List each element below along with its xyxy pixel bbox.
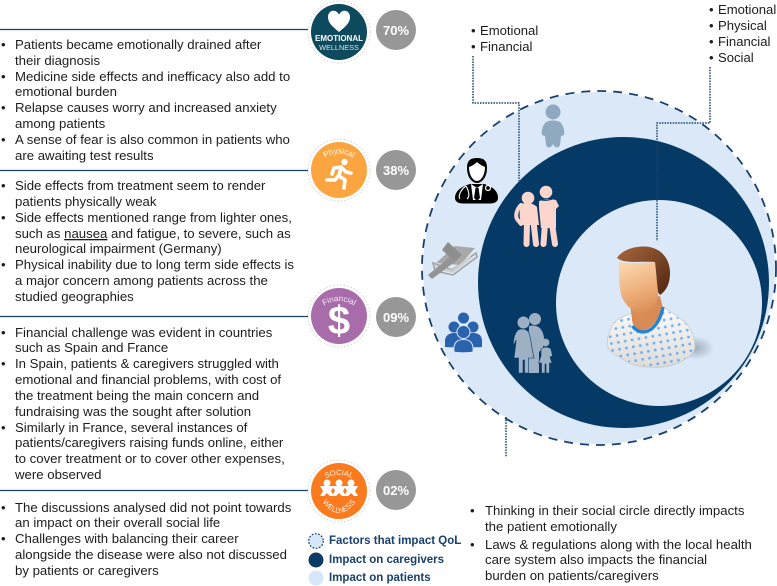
- text block: social wellness findings: [1, 500, 292, 578]
- label: emotional, physical, financial, social: Emotional: [718, 2, 776, 17]
- percentage: physical 38%: [376, 150, 416, 190]
- text block: emotional wellness findings: •: [1, 100, 6, 115]
- nested impact circles: [422, 91, 776, 445]
- badge: emotional wellness: EMOTIONAL: [315, 34, 363, 43]
- percentage: emotional 70%: [376, 10, 416, 50]
- percentage: physical 38%: 38%: [383, 163, 409, 178]
- legend: Impact on patients: [329, 572, 431, 584]
- badge: social wellness: WELLNESS: [323, 498, 355, 514]
- text block: financial wellness findings: such as Spain and France: [15, 340, 168, 355]
- text block: physical wellness findings: •: [1, 210, 6, 225]
- text block: social circle and healthcare system: the patient emotionally: [485, 519, 617, 534]
- text block: emotional wellness findings: •: [1, 132, 6, 147]
- icon: child: [542, 104, 564, 148]
- text block: physical wellness findings: •: [1, 257, 6, 272]
- text block: emotional wellness findings: emotional burden: [15, 84, 117, 99]
- label: emotional, financial: •: [471, 23, 476, 38]
- text block: social circle and healthcare system: [470, 503, 752, 583]
- dotted leader: social circle: [505, 417, 507, 457]
- caregiver circle: [478, 137, 769, 428]
- legend: [308, 534, 461, 586]
- badge: emotional wellness: [308, 1, 370, 63]
- text block: financial wellness findings: the treatment being the main concern and: [15, 388, 259, 403]
- text block: social wellness findings: alongside the disease were also not discussed: [15, 547, 287, 562]
- text block: physical wellness findings: such as nausea and fatigue, to severe, such as: [15, 226, 291, 241]
- label: emotional, financial: Financial: [480, 39, 532, 54]
- label: emotional, physical, financial, social: •: [709, 34, 714, 49]
- text block: physical wellness findings: Physical inability due to long term side effects is: [15, 257, 294, 272]
- text block: financial wellness findings: Financial challenge was evident in countries: [15, 325, 273, 340]
- badge: financial: [308, 284, 370, 348]
- badge: financial: $: [328, 299, 350, 343]
- badge: emotional wellness: WELLNESS: [319, 43, 359, 52]
- percentage: social 02%: 02%: [383, 483, 409, 498]
- label: emotional, financial: •: [471, 39, 476, 54]
- text block: financial wellness findings: to cover treatment or to cover other expenses,: [15, 451, 285, 466]
- label: emotional, physical, financial, social: •: [709, 50, 714, 65]
- percentage: social 02%: [376, 470, 416, 510]
- text block: physical wellness findings: Side effects from treatment seem to render: [15, 178, 266, 193]
- text block: financial wellness findings: [1, 325, 285, 482]
- text block: financial wellness findings: patients/caregivers raising funds online, either: [15, 435, 284, 450]
- text block: financial wellness findings: In Spain, patients & caregivers struggled with: [15, 356, 279, 371]
- label: emotional, physical, financial, social: Social: [718, 50, 754, 65]
- text block: social circle and healthcare system: Laws & regulations along with the local health: [485, 537, 752, 552]
- outer dashed ring: [422, 91, 776, 445]
- text block: emotional wellness findings: [1, 37, 290, 163]
- neck: [630, 296, 663, 331]
- badge: physical: Physical: [323, 148, 356, 158]
- label: emotional, financial: [471, 23, 538, 54]
- label: emotional, physical, financial, social: Financial: [718, 34, 770, 49]
- text block: social wellness findings: •: [1, 531, 6, 546]
- icon: doctor: [455, 158, 498, 204]
- text block: financial wellness findings: Similarly in France, several instances of: [15, 420, 248, 435]
- percentage: financial 09%: [376, 297, 416, 337]
- patient circle: [556, 200, 762, 406]
- text block: social wellness findings: The discussions analysed did not point towards: [15, 500, 292, 515]
- dotted leader: emotional and financial: [473, 56, 519, 181]
- icon: gavel on law book: [428, 242, 477, 279]
- hair: [617, 246, 670, 295]
- text block: social circle and healthcare system: •: [470, 537, 475, 552]
- text block: social wellness findings: Challenges with balancing their career: [15, 531, 239, 546]
- face: [619, 262, 658, 314]
- text block: social wellness findings: an impact on their overall social life: [15, 515, 220, 530]
- percentage: emotional 70%: 70%: [383, 23, 409, 38]
- text block: social circle and healthcare system: •: [470, 503, 475, 518]
- percentage: financial 09%: 09%: [383, 310, 409, 325]
- text block: social wellness findings: by patients or caregivers: [15, 563, 159, 578]
- outer circle: factors that impact QoL: [423, 92, 775, 444]
- label: emotional, financial: Emotional: [480, 23, 538, 38]
- shadow: [676, 336, 714, 360]
- section divider lines: [0, 30, 310, 490]
- label: emotional, physical, financial, social: •: [709, 2, 714, 17]
- badge: social wellness: SOCIAL: [324, 470, 352, 478]
- text block: physical wellness findings: [1, 178, 294, 304]
- text block: emotional wellness findings: •: [1, 37, 6, 52]
- label: emotional, physical, financial, social: [709, 2, 776, 65]
- label: emotional, physical, financial, social: •: [709, 18, 714, 33]
- text block: emotional wellness findings: Medicine side effects and inefficacy also add to: [15, 69, 290, 84]
- text block: emotional wellness findings: Patients became emotionally drained after: [15, 37, 262, 52]
- text block: physical wellness findings: studied geographies: [15, 289, 134, 304]
- legend: Factors that impact QoL: [329, 535, 461, 547]
- text block: financial wellness findings: •: [1, 420, 6, 435]
- dotted leader: all four factors: [657, 67, 710, 241]
- ear: [654, 275, 666, 291]
- text block: financial wellness findings: emotional and financial problems, with cost of: [15, 372, 281, 387]
- gown: [607, 307, 695, 367]
- label: emotional, physical, financial, social: Physical: [718, 18, 767, 33]
- text block: emotional wellness findings: Relapse causes worry and increased anxiety: [15, 100, 277, 115]
- text block: emotional wellness findings: A sense of fear is also common in patients who: [15, 132, 290, 147]
- legend: Impact on caregivers: [329, 554, 444, 566]
- text block: emotional wellness findings: their diagnosis: [15, 53, 100, 68]
- text block: financial wellness findings: •: [1, 325, 6, 340]
- text block: emotional wellness findings: •: [1, 69, 6, 84]
- collar: [632, 307, 663, 332]
- text block: emotional wellness findings: are awaiting test results: [15, 148, 154, 163]
- text block: social circle and healthcare system: Thinking in their social circle directly impacts: [485, 503, 745, 518]
- badge: financial: Financial: [322, 296, 356, 306]
- icon: couple supporting each other: [516, 186, 560, 244]
- icon: group of people: [445, 312, 482, 353]
- text block: physical wellness findings: •: [1, 178, 6, 193]
- text block: physical wellness findings: patients physically weak: [15, 194, 157, 209]
- badge: social wellness: [308, 460, 370, 522]
- text block: social circle and healthcare system: burden on patients/caregivers: [485, 568, 659, 583]
- text block: physical wellness findings: Side effects mentioned range from lighter ones,: [15, 210, 292, 225]
- text block: physical wellness findings: neurological impairment (Germany): [15, 241, 222, 256]
- badge: physical: [308, 138, 370, 202]
- text block: physical wellness findings: a major concern among patients across the: [15, 273, 268, 288]
- text block: social circle and healthcare system: care system also impacts the financial: [485, 552, 707, 567]
- text block: social wellness findings: •: [1, 500, 6, 515]
- text block: financial wellness findings: fundraising was the sought after solution: [15, 404, 251, 419]
- icon: family: [513, 313, 552, 373]
- text block: financial wellness findings: were observed: [14, 467, 102, 482]
- text block: emotional wellness findings: among patients: [15, 116, 106, 131]
- text block: financial wellness findings: •: [1, 356, 6, 371]
- icon: patient in gown: [607, 246, 714, 367]
